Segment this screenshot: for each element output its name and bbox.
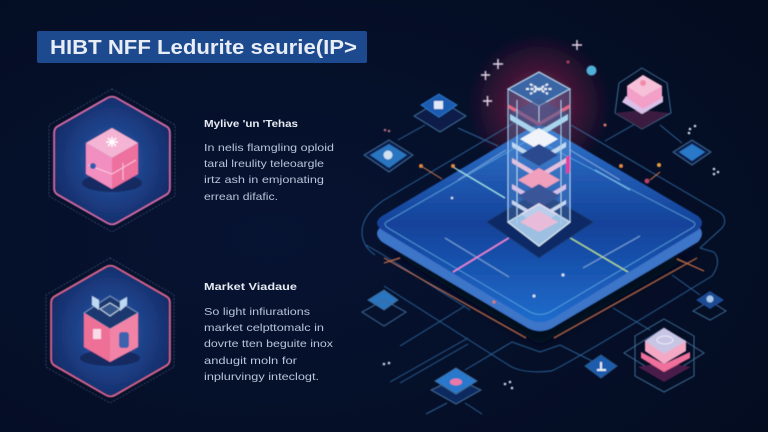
blue orb bbox=[586, 66, 596, 76]
title banner bbox=[37, 31, 367, 63]
heading: Mylive un Tehas: Mylive 'un 'Tehas bbox=[204, 118, 298, 130]
node: top right hexagon cube bbox=[615, 68, 671, 129]
text block: first description: In nelis flamgling oploid bbox=[204, 142, 334, 154]
title banner: HIBT NFF Ledurite seurie(IP> bbox=[50, 36, 357, 59]
recess under tower bbox=[486, 190, 594, 258]
panel: first feature bbox=[49, 89, 334, 232]
circuit lines bbox=[362, 123, 725, 383]
node: bottom pink chip bbox=[426, 368, 482, 414]
node: right small chip bbox=[693, 291, 726, 320]
node: bottom blue chip bbox=[585, 355, 617, 378]
node: lower left chip bbox=[362, 290, 406, 326]
text block: market description: dovrte tten beguite inox bbox=[204, 338, 334, 350]
platform shadow bbox=[380, 245, 702, 345]
text block: market description: market celpttomalc in bbox=[204, 322, 324, 334]
floating platform bbox=[377, 126, 702, 331]
orange edge traces bbox=[384, 166, 704, 338]
glass data tower bbox=[508, 72, 570, 246]
text block: market description: inplurvingy inteclogt. bbox=[204, 371, 319, 383]
text block: first description bbox=[204, 142, 334, 203]
panel: market value feature bbox=[46, 258, 334, 403]
icon: hexagon with pink box bbox=[46, 258, 174, 403]
isometric network illustration bbox=[362, 33, 726, 414]
text block: first description: taral lreulity teleoargle bbox=[204, 158, 324, 170]
node: right blue chip bbox=[673, 140, 711, 165]
node: top left chip bbox=[414, 94, 466, 132]
icon: hexagon with pink cube bbox=[49, 89, 175, 232]
text block: market description bbox=[204, 306, 334, 383]
sparkles bbox=[481, 40, 582, 106]
text block: first description: errean difafic. bbox=[204, 191, 278, 203]
heading: Market Viadaue: Market Viadaue bbox=[204, 281, 297, 293]
text block: first description: irtz ash in emjonating bbox=[204, 174, 324, 186]
node: large lower right hexagon cube bbox=[624, 319, 704, 392]
tower glow bbox=[467, 33, 611, 177]
text block: market description: So light infiurations bbox=[204, 306, 310, 318]
node: left chip bbox=[364, 140, 413, 172]
text block: market description: andugit moln for bbox=[204, 355, 298, 367]
small decorative dots bbox=[383, 60, 719, 389]
